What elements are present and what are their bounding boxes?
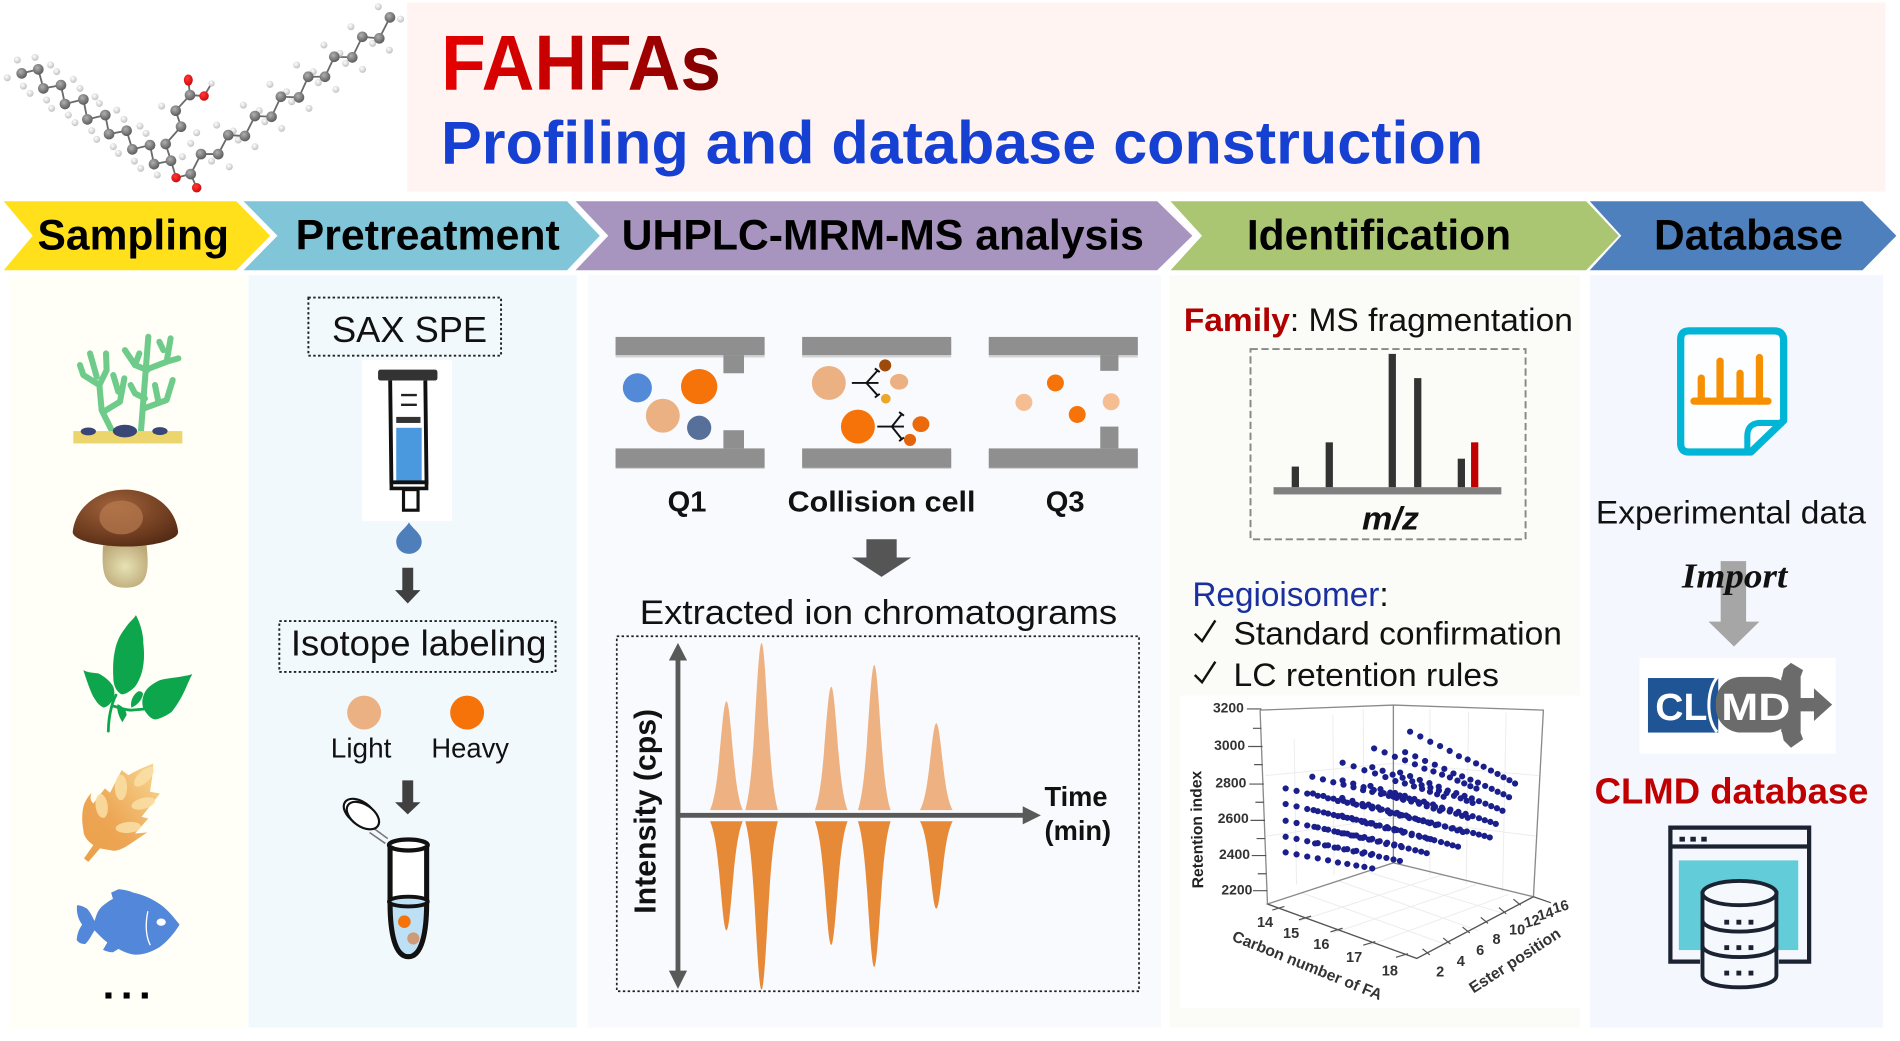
- y tick labels: 3200: [1213, 700, 1244, 716]
- y ticks: [1247, 709, 1267, 891]
- step: UHPLC-MRM-MS analysis: UHPLC-MRM-MS analysis: [622, 212, 1144, 259]
- carbon number labels: 18: [1382, 964, 1398, 980]
- carbon number labels: 16: [1313, 937, 1329, 953]
- y tick labels: 2800: [1215, 775, 1247, 791]
- icon: SPE syringe: [362, 360, 452, 521]
- step: Pretreatment: Pretreatment: [296, 212, 560, 259]
- carbon number labels: 15: [1283, 926, 1299, 942]
- panel: pretreatment: [248, 275, 577, 1028]
- bottom axes ticks: [1267, 897, 1551, 958]
- ester position labels: 10: [1509, 922, 1525, 938]
- legend: Light: Light: [331, 732, 392, 763]
- ester position labels: 16: [1551, 898, 1571, 917]
- SAX SPE box: SAX SPE: [332, 309, 487, 350]
- title banner: [407, 2, 1885, 192]
- y tick labels: 2600: [1218, 810, 1249, 826]
- ellipsis dots: [105, 992, 148, 999]
- light isotope peaks: [710, 643, 953, 810]
- data points: [1286, 732, 1515, 868]
- axis label: Intensity: Intensity (cps): [630, 709, 663, 914]
- step: Pretreatment: [244, 201, 600, 270]
- y tick labels: 2200: [1221, 881, 1253, 897]
- heading: Family: Family: MS fragmentation: [1184, 301, 1573, 338]
- title: FAHFAs: FAHFAs: [441, 21, 721, 107]
- logo: CLMD: [1639, 658, 1836, 754]
- step: Sampling: [4, 201, 270, 270]
- step: Identification: Identification: [1247, 212, 1511, 259]
- legend: Heavy: [431, 696, 509, 763]
- quadrupole labels: [668, 486, 1085, 518]
- chart frame: [1260, 705, 1543, 958]
- y tick labels: 3000: [1214, 737, 1245, 753]
- panel: UHPLC-MRM-MS analysis: [588, 275, 1161, 1028]
- carbon number labels: 14: [1257, 915, 1273, 931]
- chromatogram chart: [617, 636, 1139, 991]
- arrow: [852, 539, 911, 577]
- legend: Heavy: Heavy: [431, 732, 509, 763]
- ester position labels: 14: [1536, 905, 1556, 925]
- axis label: Time: (min): [1045, 815, 1111, 846]
- icon: database window: [1670, 828, 1809, 987]
- icon: fish: [77, 889, 180, 955]
- logo: CLMD: MD: [1721, 686, 1790, 728]
- 3D retention index chart: [1180, 696, 1580, 1008]
- Isotope labeling box: Isotope labeling: [291, 623, 546, 664]
- heading: Regioisomer: Regioisomer:: [1192, 576, 1389, 614]
- y tick labels: 2400: [1219, 846, 1250, 862]
- icon: data document: [1681, 331, 1784, 452]
- ester position labels: 6: [1476, 943, 1484, 959]
- quadrupole labels: Collision cell: [788, 486, 975, 518]
- step: UHPLC-MRM-MS analysis: [576, 201, 1192, 270]
- carbon number axis title: Carbon number of FA: [1230, 928, 1384, 1004]
- arrow: import: [1709, 561, 1759, 647]
- axis label: Time: [1045, 781, 1111, 846]
- logo: CLMD: CL: [1655, 686, 1707, 728]
- subtitle: Profiling and database construction: [441, 109, 1483, 177]
- panel: identification: [1169, 275, 1580, 1028]
- SAX SPE box: [308, 298, 501, 356]
- step: Database: Database: [1654, 212, 1843, 259]
- mass spectrum: [1251, 349, 1526, 539]
- quadrupole labels: Q3: [1046, 486, 1085, 518]
- icon: mushroom: [73, 490, 178, 588]
- step: Identification: [1171, 201, 1619, 270]
- icon: wheat: [82, 763, 160, 862]
- ester position axis title: Ester position: [1466, 925, 1564, 997]
- checklist: Standard confirmation: [1234, 615, 1562, 652]
- carbon number labels: 17: [1346, 950, 1362, 966]
- icon: sample tube: [339, 793, 428, 957]
- panel: sampling: [10, 275, 247, 1028]
- panel: database: [1590, 275, 1883, 1028]
- mass spectrum: m/z: [1362, 500, 1420, 537]
- quadrupole Q3: [989, 337, 1138, 469]
- ester position labels: 8: [1492, 932, 1501, 948]
- y axis title: Retention index: [1188, 770, 1207, 888]
- step: Database: [1590, 201, 1896, 270]
- label: Import: Import: [1681, 557, 1789, 596]
- quadrupole Q1: [616, 337, 765, 469]
- ester position labels: 2: [1436, 965, 1444, 981]
- quadrupole collision cell: [802, 337, 951, 469]
- label: CLMD database: CLMD database: [1595, 770, 1868, 811]
- workflow header arrows: [4, 201, 1896, 270]
- icon: droplet: [396, 522, 422, 554]
- y tick labels: [1213, 700, 1253, 897]
- quadrupole labels: Q1: [668, 486, 706, 518]
- heading: Extracted ion chromatograms: Extracted ion chromatograms: [640, 594, 1117, 632]
- step: Sampling: Sampling: [38, 212, 229, 259]
- heavy isotope peaks: [710, 821, 953, 990]
- checklist: LC retention rules: [1234, 656, 1499, 693]
- axis label: Time: Time: [1045, 781, 1108, 812]
- legend: Light: [331, 696, 392, 763]
- checklist: [1195, 615, 1562, 693]
- molecule: FAHFA ball and stick: [4, 3, 404, 192]
- icon: seaweed coral: [73, 337, 182, 443]
- label: Experimental data: Experimental data: [1596, 494, 1867, 531]
- ester position labels: [1436, 898, 1571, 981]
- arrow: [395, 780, 420, 814]
- carbon number labels: [1257, 915, 1398, 980]
- ester position labels: 4: [1457, 954, 1465, 970]
- icon: green leaves: [83, 615, 192, 731]
- ester position labels: 12: [1523, 912, 1542, 932]
- axes: [669, 643, 1041, 989]
- arrow: [395, 568, 420, 604]
